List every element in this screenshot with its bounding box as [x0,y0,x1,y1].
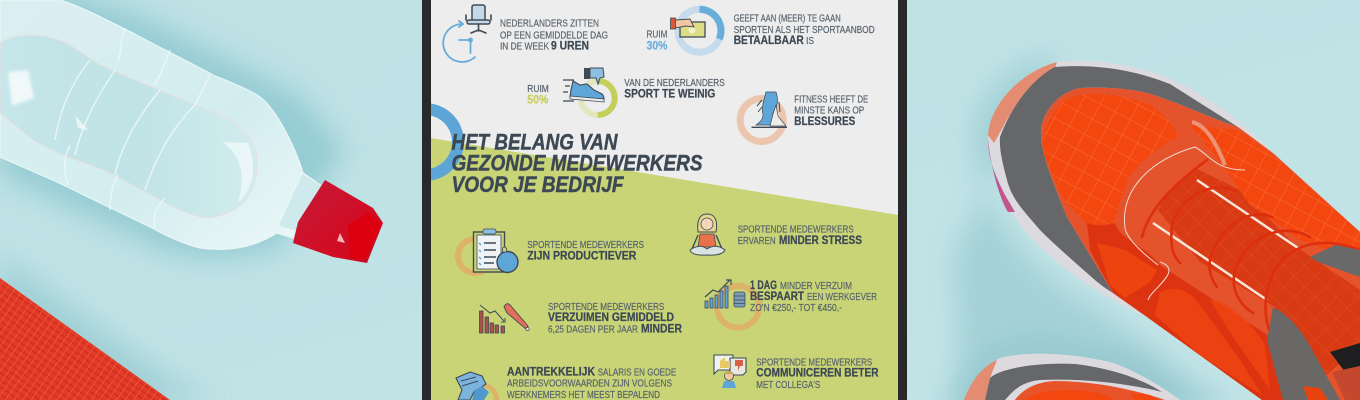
icon: growth chart with coins [705,280,759,328]
text: 1 dag bespaart: BESPAART [750,289,805,303]
text: minder stress: MINDER STRESS [779,233,862,247]
text: minder stress: ERVAREN [738,236,776,247]
stat: ruim 30% [646,30,668,50]
clipboard poster frame [422,0,907,400]
text: sport te weinig: SPORT TE WEINIG [624,86,715,100]
text: aantrekkelijk [507,366,676,398]
text: aantrekkelijk: SALARIS EN GOEDE [598,367,676,378]
icon: shaking arms [456,372,497,400]
text: betaalbaar [734,14,875,47]
text: 1 dag bespaart: 1 DAG [750,278,777,292]
heading: GEZONDE MEDEWERKERS [452,151,703,176]
icon: hand with money [670,18,705,37]
donut: 50 percent [563,68,615,115]
text: 1 dag bespaart: ZO'N €250,- TOT €450,- [750,303,842,314]
text: nederlanders zitten: 9 UREN [551,38,589,52]
text: verzuimen: VERZUIMEN GEMIDDELD [548,310,674,324]
text: communiceren beter: COMMUNICEREN BETER [756,366,879,380]
text: verzuimen: 6,25 DAGEN PER JAAR [548,324,638,335]
text: sport te weinig: VAN DE NEDERLANDERS [624,78,725,89]
text: aantrekkelijk: ARBEIDSVOORWAARDEN ZIJN VOLGENS [507,379,672,390]
text: 1 dag bespaart: MINDER VERZUIM [780,281,852,292]
stat: ruim 50% [528,84,548,104]
poster panel [392,0,898,400]
running shoe large [955,55,1360,400]
text: blessures: BLESSURES [794,114,855,128]
heading: HET BELANG VAN [452,130,618,154]
text: nederlanders zitten [500,19,608,52]
text: verzuimen: SPORTENDE MEDEWERKERS [548,302,665,313]
text: nederlanders zitten: OP EEN GEMIDDELDE DAG [500,30,608,41]
text: communiceren beter: SPORTENDE MEDEWERKERS [756,358,873,369]
icon: meditating woman [690,214,725,255]
stat: ruim 50%: 50% [527,92,549,106]
text: betaalbaar: IS [806,36,814,47]
text: sport te weinig [624,78,724,98]
stat: ruim 50%: RUIM [527,84,549,95]
text: minder stress: SPORTENDE MEDEWERKERS [738,225,854,236]
text: blessures [794,95,869,128]
heading [452,134,703,192]
text: minder stress [738,225,862,244]
text: 1 dag bespaart [750,280,877,312]
text: blessures: FITNESS HEEFT DE [794,95,869,106]
green lower section [431,138,898,400]
text: betaalbaar: BETAALBAAR [734,33,804,47]
icon: sneaker with thumb down [563,68,604,102]
text: 1 dag bespaart: EEN WERKGEVER [807,292,877,303]
donut: 30 percent [670,9,721,52]
text: betaalbaar: SPORTEN ALS HET SPORTAANBOD [734,25,875,36]
text: nederlanders zitten: IN DE WEEK [500,41,549,52]
text: verzuimen: MINDER [641,321,682,335]
icon: office chair and clock [443,5,491,62]
blue ring decoration [431,104,464,180]
text: productiever [527,240,644,260]
text: blessures: MINSTE KANS OP [794,106,865,117]
icon: legs [752,92,787,127]
heading: VOOR JE BEDRIJF [452,172,624,197]
text: productiever: ZIJN PRODUCTIEVER [527,248,637,262]
water bottle [0,0,383,263]
icon: declining chart and thermometer [480,304,529,333]
donut: blessures [740,92,787,142]
icon: clipboard and apple [458,229,518,273]
text: communiceren beter [756,358,879,391]
icon: chat with thumbs [714,355,746,388]
text: aantrekkelijk: AANTREKKELIJK [507,364,595,378]
text: betaalbaar: GEEFT AAN (MEER) TE GAAN [734,14,841,25]
text: nederlanders zitten: NEDERLANDERS ZITTEN [500,19,599,30]
text: verzuimen [548,302,682,335]
running shoe small [945,340,1210,400]
text: communiceren beter: MET COLLEGA'S [756,380,821,391]
yoga mat [0,255,215,400]
stat: ruim 30%: 30% [646,38,668,52]
stat: ruim 30%: RUIM [646,30,668,41]
text: productiever: SPORTENDE MEDEWERKERS [527,240,644,251]
